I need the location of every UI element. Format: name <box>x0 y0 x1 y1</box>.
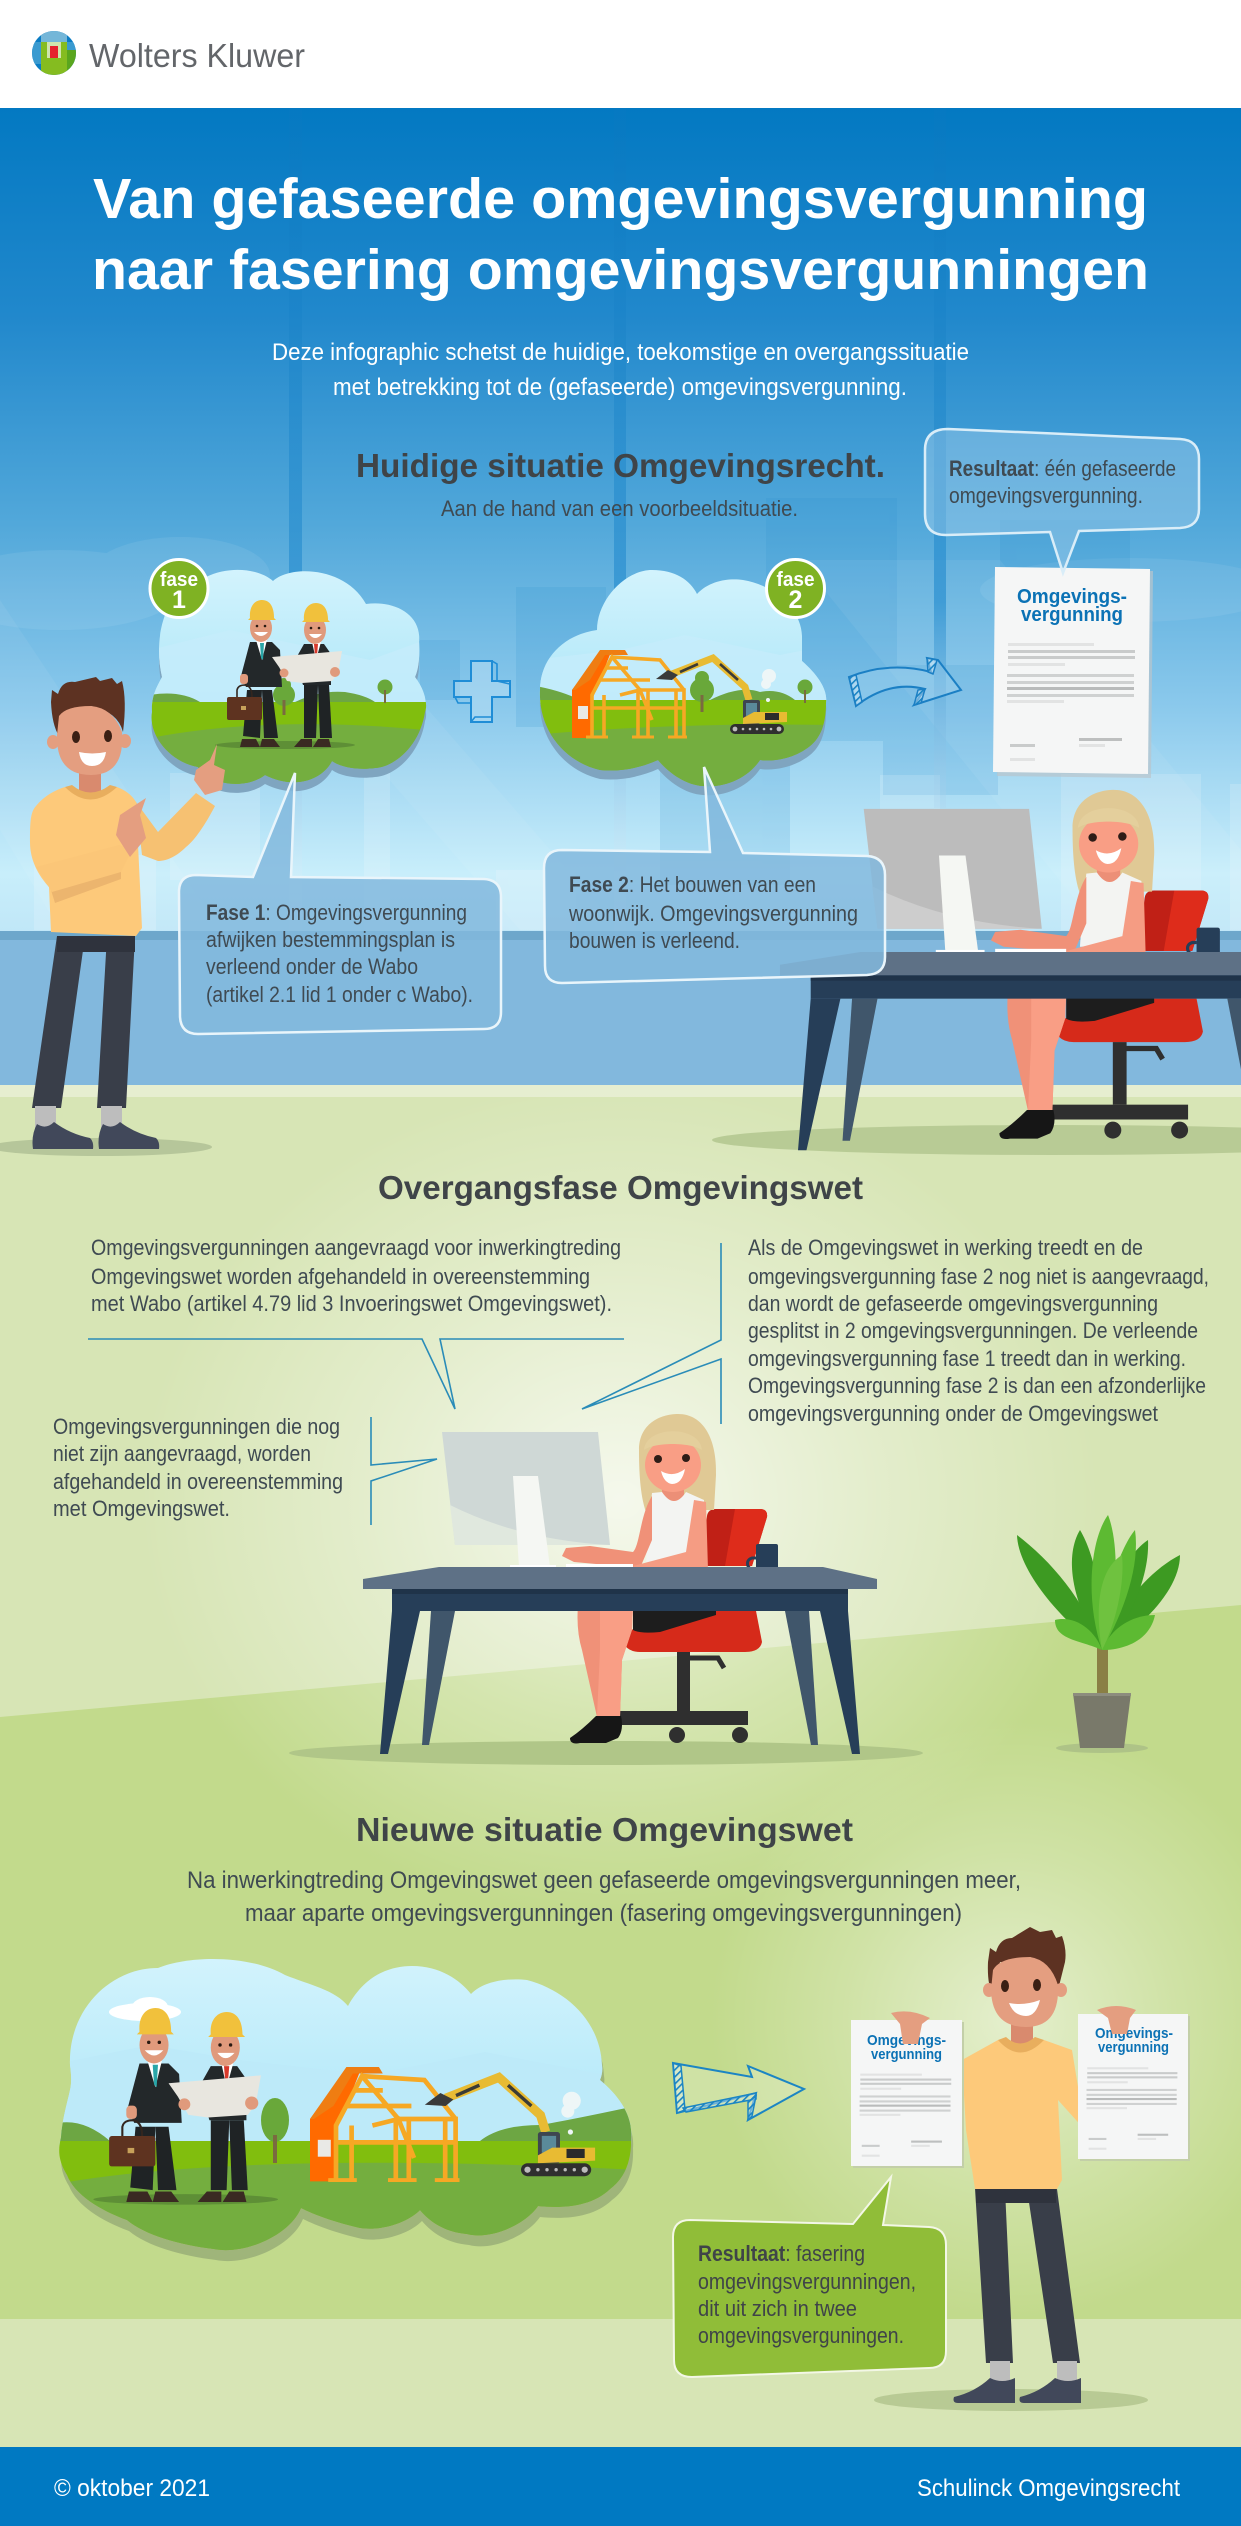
text block: nog niet aangevraagd: niet zijn aangevraagd, worden <box>53 1441 311 1466</box>
document: omgevingsvergunning: vergunning <box>1021 604 1123 626</box>
document right: Omgevings- <box>1095 2025 1173 2042</box>
heading: Huidige situatie <box>356 447 885 521</box>
heading: Huidige situatie: Aan de hand van een voorbeeldsituatie. <box>441 496 798 521</box>
text block: fase 2 nog niet aangevraagd: Als de Omgevingswet in werking treedt en de <box>748 1235 1143 1260</box>
text block: nog niet aangevraagd: Omgevingsvergunningen die nog <box>53 1414 340 1439</box>
intro text: met betrekking tot de (gefaseerde) omgevingsvergunning. <box>333 374 907 401</box>
cloud: fase 1 <box>150 565 430 797</box>
heading: Nieuwe situatie: maar aparte omgevingsvergunningen (fasering omgevingsvergunningen) <box>245 1900 962 1927</box>
callout: fase 1: (artikel 2.1 lid 1 onder c Wabo). <box>206 982 473 1007</box>
callout: resultaat: Resultaat: één gefaseerde <box>949 456 1176 481</box>
document: omgevingsvergunning <box>993 567 1153 778</box>
callout: resultaat <box>925 429 1199 573</box>
title: Van gefaseerde omgevingsvergunning <box>93 167 1148 231</box>
callout: resultaat (green): omgevingsvergunningen, <box>698 2269 916 2294</box>
callout: fase 1: Fase 1: Omgevingsvergunning <box>206 900 467 925</box>
text block: nog niet aangevraagd <box>53 1414 343 1521</box>
title <box>92 167 1149 302</box>
text block: fase 2 nog niet aangevraagd: dan wordt de gefaseerde omgevingsvergunning <box>748 1291 1158 1316</box>
title: naar fasering omgevingsvergunningen <box>92 238 1149 302</box>
callout: fase 1 <box>179 773 501 1034</box>
icon: Wolters Kluwer globe <box>32 31 76 75</box>
logo wordmark: Wolters Kluwer <box>89 37 305 74</box>
heading: Nieuwe situatie: Na inwerkingtreding Omgevingswet geen gefaseerde omgevingsvergunningen meer, <box>187 1867 1021 1894</box>
callout: resultaat (green): Resultaat: fasering <box>698 2241 865 2266</box>
heading: Nieuwe situatie: Nieuwe situatie Omgevingswet <box>356 1811 853 1848</box>
intro text <box>272 339 969 401</box>
man holding two documents <box>851 1927 1190 2411</box>
callout: resultaat (green): omgevingsverguningen. <box>698 2323 904 2348</box>
callout: fase 2: Fase 2: Het bouwen van een <box>569 872 816 897</box>
document left <box>851 2011 964 2168</box>
house frame (large) <box>310 2067 459 2181</box>
text block: fase 2 nog niet aangevraagd: omgevingsvergunning onder de Omgevingswet <box>748 1401 1158 1426</box>
workers with blueprint (large) <box>93 2008 278 2205</box>
house frame under construction <box>572 650 687 738</box>
excavator (large) <box>425 2077 595 2176</box>
badge: fase 2: 2 <box>789 586 802 614</box>
callout: fase 2 <box>544 767 885 983</box>
badge: fase 1: 1 <box>172 586 186 614</box>
text block: aangevraagd voor inwerkingtreding <box>91 1235 621 1316</box>
badge: fase 2: fase <box>776 569 814 591</box>
arrow: to resultaat document <box>849 658 961 706</box>
text block: fase 2 nog niet aangevraagd: omgevingsvergunning fase 1 treedt dan in werking. <box>748 1346 1186 1371</box>
arrow: to two documents <box>673 2063 804 2120</box>
workers with blueprint <box>215 600 355 749</box>
icon: plus <box>454 661 510 722</box>
header logo bar <box>32 31 304 75</box>
badge: fase 2 <box>766 560 824 618</box>
text block: nog niet aangevraagd: afgehandeld in overeenstemming <box>53 1469 343 1494</box>
text block: aangevraagd voor inwerkingtreding: Omgevingswet worden afgehandeld in overeenstemming <box>91 1264 590 1289</box>
callout: resultaat (green) <box>673 2177 946 2377</box>
background: green floor sections <box>0 1080 1241 2447</box>
text block: aangevraagd voor inwerkingtreding: met Wabo (artikel 4.79 lid 3 Invoeringswet Omgevingswet). <box>91 1291 612 1316</box>
badge: fase 1: fase <box>160 569 198 591</box>
plant <box>1017 1515 1180 1753</box>
document left: vergunning <box>871 2046 942 2063</box>
document right <box>1078 2006 1190 2161</box>
cloud: fase 2 <box>530 565 830 800</box>
badge: fase 1 <box>150 560 208 618</box>
heading: Overgangsfase: Overgangsfase Omgevingswet <box>378 1169 863 1206</box>
excavator <box>656 658 787 734</box>
callout: fase 1: afwijken bestemmingsplan is <box>206 927 455 952</box>
footer bar <box>0 2447 1241 2526</box>
heading: Nieuwe situatie <box>187 1811 1021 1927</box>
man pointing <box>0 677 225 1156</box>
background: office window with sky <box>0 108 1241 1097</box>
callout: resultaat: omgevingsvergunning. <box>949 483 1143 508</box>
callout: fase 2: woonwijk. Omgevingsvergunning <box>568 901 858 926</box>
heading: Huidige situatie: Huidige situatie Omgevingsrecht. <box>356 447 885 484</box>
text block: aangevraagd voor inwerkingtreding: Omgevingsvergunningen aangevraagd voor inwerkingtreding <box>91 1235 621 1260</box>
callout lines to monitor <box>88 1243 721 1525</box>
text block: nog niet aangevraagd: met Omgevingswet. <box>53 1496 230 1521</box>
callout: fase 1: verleend onder de Wabo <box>206 954 418 979</box>
footer bar: © oktober 2021 <box>54 2475 210 2502</box>
callout: resultaat (green): dit uit zich in twee <box>698 2296 857 2321</box>
desk scene: woman at computer (top) <box>712 790 1241 1155</box>
callout: fase 2: bouwen is verleend. <box>569 928 740 953</box>
large cloud scene <box>59 1959 634 2262</box>
document left: Omgevings- <box>867 2032 946 2049</box>
document right: vergunning <box>1098 2039 1169 2056</box>
footer bar: Schulinck Omgevingsrecht <box>917 2475 1180 2502</box>
intro text: Deze infographic schetst de huidige, toekomstige en overgangssituatie <box>272 339 969 366</box>
desk scene: woman at computer (middle) <box>289 1414 923 1765</box>
document: omgevingsvergunning: Omgevings- <box>1017 586 1127 608</box>
text block: fase 2 nog niet aangevraagd <box>748 1235 1209 1426</box>
